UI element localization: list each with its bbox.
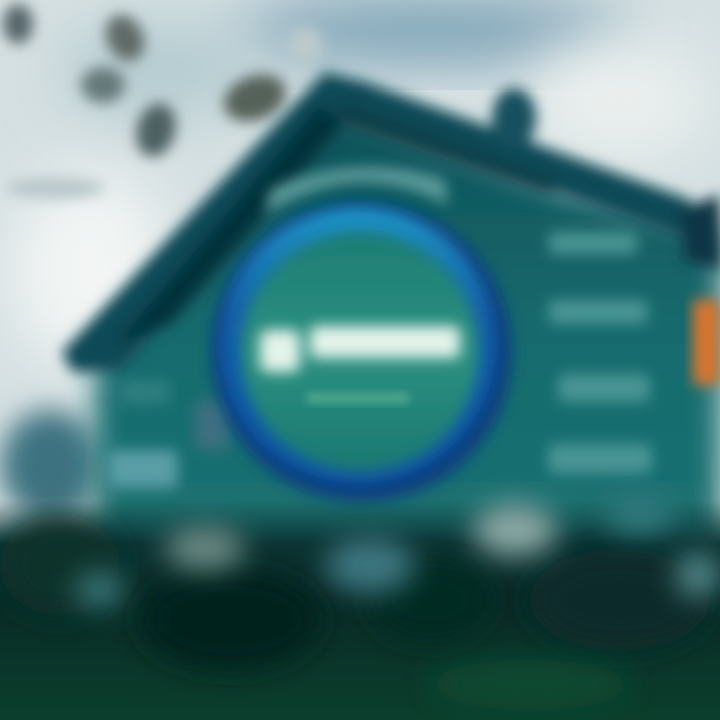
house wall xyxy=(95,105,720,700)
badge inner circle xyxy=(241,232,479,472)
badge ring xyxy=(220,207,496,483)
hedge foreground xyxy=(0,500,720,720)
orange window xyxy=(693,300,720,385)
distant trees xyxy=(0,410,100,520)
roof xyxy=(62,72,720,372)
badge title blur xyxy=(260,326,460,372)
badge ring halo xyxy=(212,202,512,502)
siding highlights xyxy=(108,232,652,488)
flower highlights xyxy=(75,497,720,607)
tree leaves xyxy=(3,4,323,199)
badge subtitle blur xyxy=(306,392,410,404)
arc above badge xyxy=(265,167,448,215)
